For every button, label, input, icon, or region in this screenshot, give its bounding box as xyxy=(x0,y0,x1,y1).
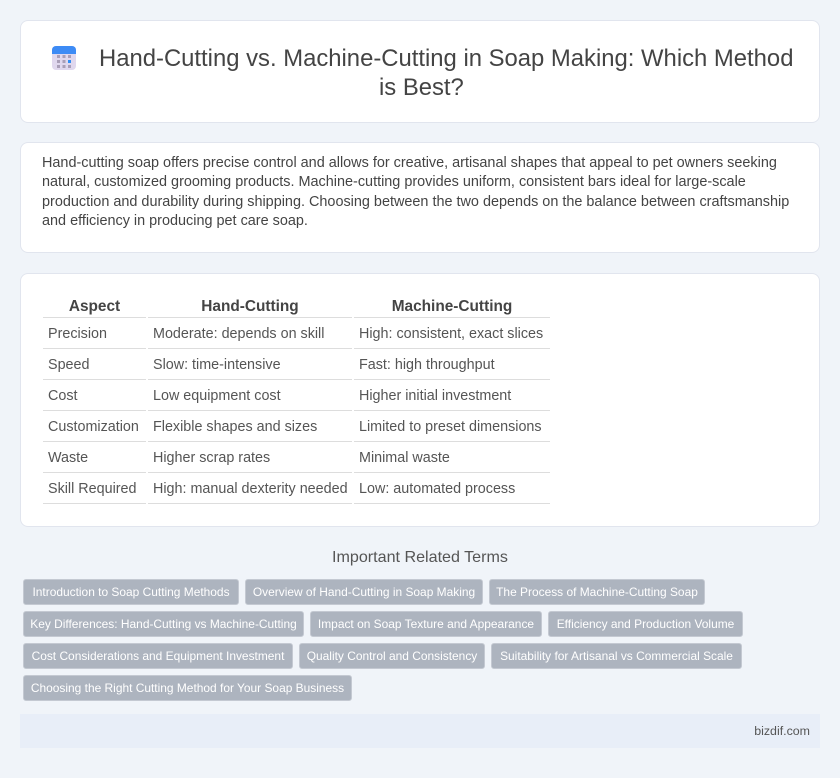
tag xyxy=(245,579,483,605)
row: Waste: Higher scrap rates xyxy=(153,450,270,466)
row: Customization: Flexible shapes and sizes xyxy=(153,419,317,435)
tag: Cost Considerations and Equipment Investment xyxy=(32,649,284,663)
row: Cost xyxy=(48,388,512,404)
tag: Choosing the Right Cutting Method for Your Soap Business xyxy=(31,681,344,695)
row: Precision: Precision xyxy=(48,326,107,342)
tag xyxy=(23,579,239,605)
row: Precision: High: consistent, exact slices xyxy=(359,326,543,342)
table header: Hand-Cutting xyxy=(201,298,299,315)
intro paragraph: and efficiency in producing pet care soap. xyxy=(42,213,308,229)
row: Waste: Minimal waste xyxy=(359,450,450,466)
row: Speed xyxy=(48,357,495,373)
row: Waste: Waste xyxy=(48,450,88,466)
table header: Aspect xyxy=(69,298,120,315)
tag xyxy=(491,643,742,669)
tag xyxy=(23,611,304,637)
row: Customization: Limited to preset dimensions xyxy=(359,419,542,435)
row: Customization xyxy=(48,419,542,435)
row: Customization: Customization xyxy=(48,419,139,435)
row: Speed: Speed xyxy=(48,357,89,373)
footer credit: bizdif.com xyxy=(754,724,810,738)
tag: Introduction to Soap Cutting Methods xyxy=(32,585,230,599)
heading: related terms: Important Related Terms xyxy=(332,548,508,566)
tag xyxy=(548,611,743,637)
intro paragraph: Hand-cutting soap offers precise control and allows for creative, artisanal shapes that appeal to pet owners seeking xyxy=(42,155,777,171)
tag group: related terms xyxy=(23,579,743,701)
intro paragraph xyxy=(42,155,789,229)
tag: Key Differences: Hand-Cutting vs Machine-Cutting xyxy=(30,617,297,631)
tag xyxy=(23,675,352,701)
title: Hand-Cutting vs. Machine-Cutting in Soap Making: Which Method xyxy=(99,45,793,72)
tag: The Process of Machine-Cutting Soap xyxy=(496,585,698,599)
tag xyxy=(310,611,542,637)
tag: Overview of Hand-Cutting in Soap Making xyxy=(253,585,475,599)
title xyxy=(99,45,793,101)
row: Waste xyxy=(48,450,450,466)
row: Skill Required xyxy=(48,481,515,497)
intro paragraph: natural, customized grooming products. Machine-cutting provides uniform, consistent bars ideal for large-scale xyxy=(42,174,746,190)
row: Speed: Slow: time-intensive xyxy=(153,357,281,373)
row: Skill Required: Low: automated process xyxy=(359,481,515,497)
footer bar xyxy=(20,714,820,748)
row: Skill Required: High: manual dexterity needed xyxy=(153,481,348,497)
row: Cost: Higher initial investment xyxy=(359,388,511,404)
row: Cost: Cost xyxy=(48,388,78,404)
tag xyxy=(299,643,485,669)
tag: Suitability for Artisanal vs Commercial Scale xyxy=(500,649,733,663)
row: Precision xyxy=(48,326,543,342)
tag: Quality Control and Consistency xyxy=(307,649,477,663)
row: Skill Required: Skill Required xyxy=(48,481,136,497)
title: is Best? xyxy=(379,74,464,101)
panel: intro text xyxy=(20,142,820,253)
tag xyxy=(23,643,293,669)
row: Precision: Moderate: depends on skill xyxy=(153,326,324,342)
row: Speed: Fast: high throughput xyxy=(359,357,495,373)
tag: Impact on Soap Texture and Appearance xyxy=(318,617,534,631)
tag: Efficiency and Production Volume xyxy=(557,617,734,631)
panel: comparison table xyxy=(20,273,820,527)
tag xyxy=(489,579,705,605)
icon: calendar xyxy=(52,46,76,70)
table header xyxy=(69,298,512,315)
row: Cost: Low equipment cost xyxy=(153,388,281,404)
table header: Machine-Cutting xyxy=(392,298,512,315)
intro paragraph: production and durability during shipping. Choosing between the two depends on the balance between craftsmanship xyxy=(42,194,789,210)
panel: title card xyxy=(20,20,820,123)
